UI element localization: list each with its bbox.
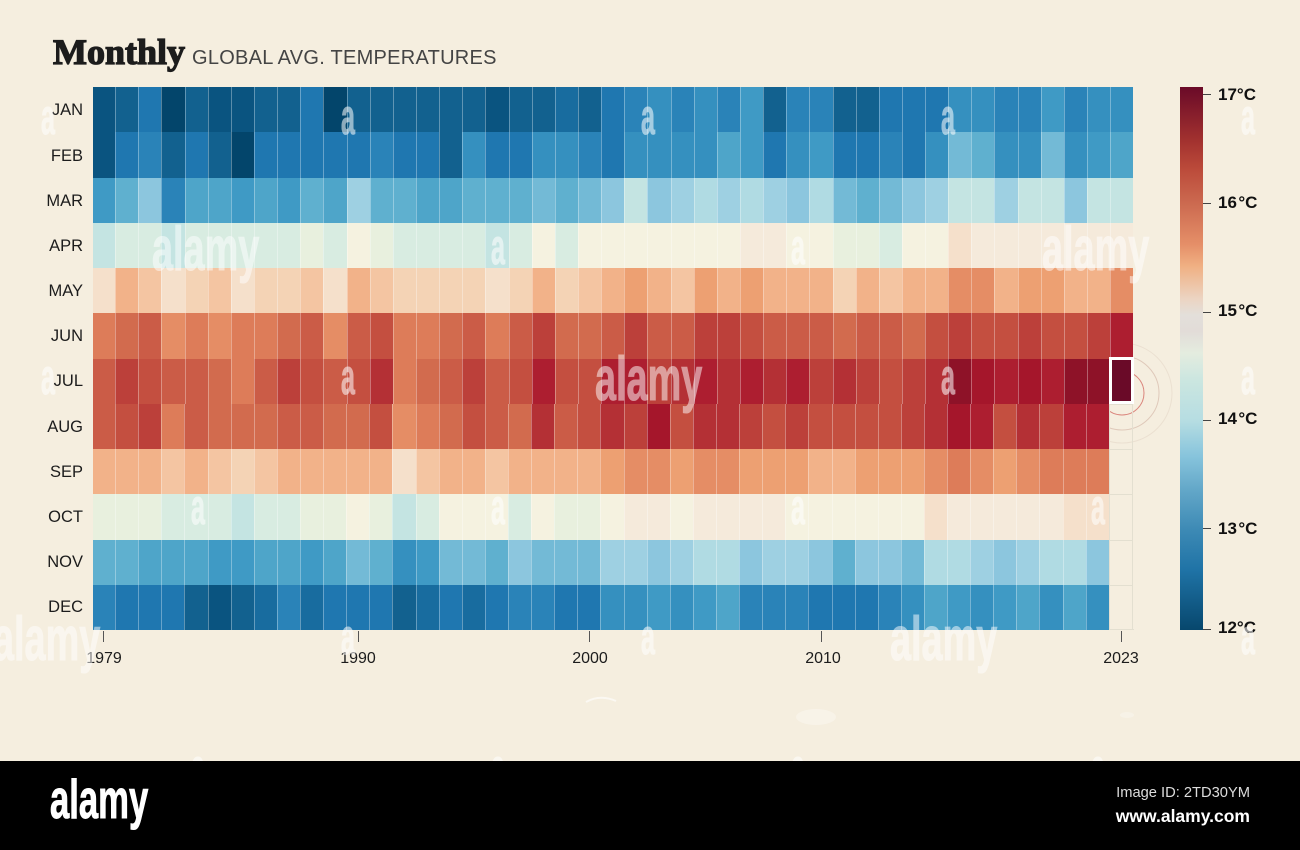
row: December: [93, 585, 1133, 630]
row: May: [93, 268, 1133, 313]
month axis labels: OCT: [48, 508, 83, 526]
faint blobs below the chart: [586, 696, 836, 725]
legend ticks and labels: 13 °C: [1218, 519, 1257, 538]
watermark overlay: a: [41, 89, 55, 145]
watermark overlay: a: [491, 479, 505, 535]
title: [52, 32, 497, 72]
month axis labels: AUG: [47, 418, 83, 436]
legend ticks and labels: 14 °C: [1218, 409, 1257, 428]
legend ticks and labels: 16 °C: [1218, 193, 1257, 212]
colour bar: [1180, 87, 1203, 630]
month axis labels: [46, 101, 83, 616]
watermark overlay: a: [1241, 89, 1255, 145]
legend: temperature colour scale: [1180, 87, 1203, 630]
watermark overlay: alamy: [890, 605, 997, 674]
heatmap: monthly temperature grid 1979-2023: [93, 87, 1133, 630]
heading: Monthly: Monthly: [53, 32, 185, 72]
month axis labels: FEB: [51, 147, 83, 165]
row: June: [93, 313, 1133, 358]
year axis: 2010: [805, 650, 841, 667]
watermark overlay: a: [191, 479, 205, 535]
legend ticks and labels: [1203, 85, 1257, 637]
month axis labels: JAN: [52, 101, 83, 119]
row: March: [93, 178, 1133, 223]
row: January: [93, 87, 1133, 132]
year axis: 1979: [86, 650, 122, 667]
blank 2023 column edge: [1110, 629, 1134, 630]
website: www.alamy.com: [1116, 806, 1250, 826]
watermark overlay: a: [1241, 349, 1255, 405]
watermark overlay: a: [341, 89, 355, 145]
footer logo: alamy: [50, 768, 148, 830]
month axis labels: JUN: [51, 327, 83, 345]
legend ticks and labels: 17°C: [1218, 85, 1256, 104]
watermark overlay: a: [791, 219, 805, 275]
year axis: 1990: [340, 650, 376, 667]
watermark overlay: a: [41, 349, 55, 405]
watermark overlay: a: [341, 349, 355, 405]
watermark overlay: a: [791, 479, 805, 535]
month axis labels: JUL: [54, 372, 83, 390]
row: July: [93, 358, 1133, 404]
watermark overlay: a: [941, 89, 955, 145]
watermark overlay: a: [941, 349, 955, 405]
row: February: [93, 132, 1133, 178]
month axis labels: APR: [49, 237, 83, 255]
row: October: [93, 494, 1133, 540]
year axis: 2023: [1103, 650, 1139, 667]
month axis labels: MAR: [46, 192, 83, 210]
watermark overlay: alamy: [1042, 215, 1149, 284]
month axis labels: NOV: [47, 553, 83, 571]
row: August: [93, 404, 1133, 449]
subtitle: GLOBAL AVG. TEMPERATURES: [192, 47, 497, 69]
year axis: 2000: [572, 650, 608, 667]
watermark overlay: a: [1091, 479, 1105, 535]
row: September: [93, 449, 1133, 494]
year axis: [86, 631, 1139, 667]
footer bar: [0, 761, 1300, 850]
row: April: [93, 223, 971, 268]
legend ticks and labels: 12°C: [1218, 618, 1256, 637]
legend ticks and labels: 15 °C: [1218, 301, 1257, 320]
watermark overlay: a: [491, 219, 505, 275]
row: November: [93, 540, 1133, 585]
watermark overlay: a: [641, 609, 655, 665]
watermark overlay: alamy: [152, 215, 259, 284]
month axis labels: DEC: [48, 598, 83, 616]
watermark overlay: alamy: [595, 345, 702, 414]
watermark overlay: a: [341, 609, 355, 665]
month axis labels: MAY: [48, 282, 83, 300]
month axis labels: SEP: [50, 463, 83, 481]
rings around the record July 2023 cell: [1110, 344, 1172, 444]
watermark overlay: a: [1241, 609, 1255, 665]
highlight: July 2023 record cell: [1109, 357, 1134, 404]
image id: Image ID: 2TD30YM: [1116, 785, 1250, 801]
watermark overlay: a: [641, 89, 655, 145]
